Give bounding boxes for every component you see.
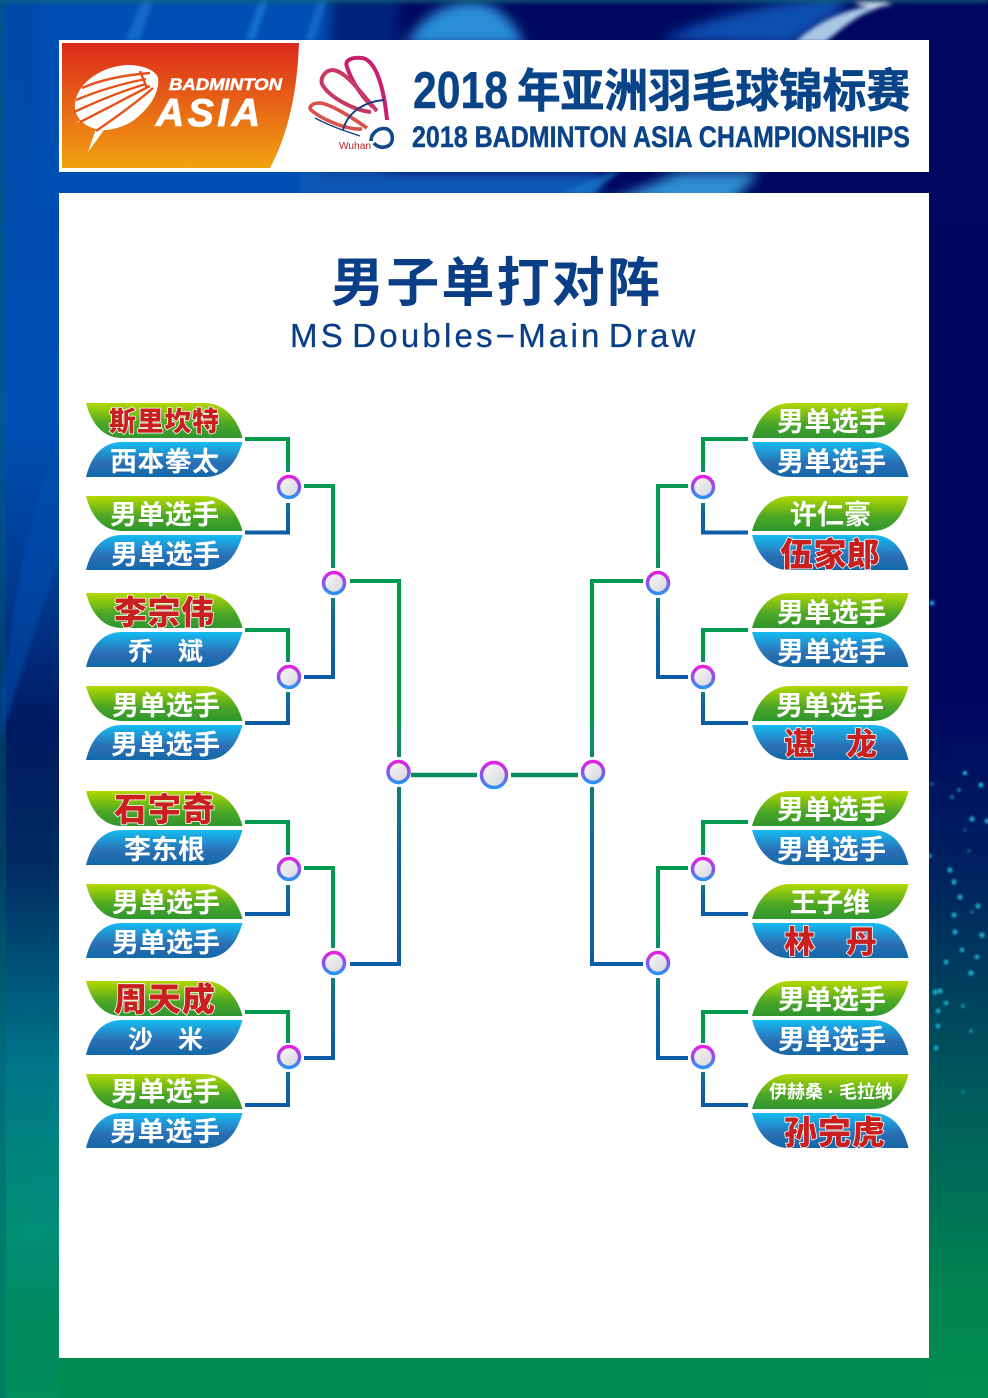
player: 李宗伟: 李宗伟: [114, 594, 214, 631]
bracket lines: [245, 439, 748, 1105]
header title: [412, 62, 910, 154]
player: 谌 龙: 谌 龙: [784, 727, 877, 762]
player: 男单选手 16: [752, 981, 908, 1016]
player: 男单选手 6: [86, 923, 242, 958]
player: 男单选手 7: [86, 1074, 242, 1109]
player: 男单选手 2: 男单选手: [111, 540, 220, 570]
player: 西本拳太: [86, 442, 242, 477]
player: 伊赫桑·毛拉纳: 伊赫桑 · 毛拉纳: [769, 1081, 893, 1102]
logo: Badminton Asia: [62, 43, 299, 168]
player: 许仁豪: 许仁豪: [790, 500, 871, 530]
player: 孙完虎: [752, 1113, 908, 1151]
player: 谌 龙: [752, 725, 908, 762]
player: 男单选手 3: [86, 686, 242, 721]
player: 斯里坎特: [86, 403, 242, 438]
player: 男单选手 16: 男单选手: [778, 985, 886, 1015]
player: 西本拳太: 西本拳太: [110, 447, 219, 477]
player: 男单选手 11: [752, 593, 908, 628]
player: 许仁豪: [752, 496, 908, 531]
player: 孙完虎: 孙完虎: [784, 1114, 885, 1151]
player: 男单选手 17: [752, 1020, 908, 1055]
header panel: [59, 40, 929, 172]
player: 男单选手 5: 男单选手: [112, 888, 220, 918]
player: 王子维: [752, 884, 908, 919]
logo: Badminton Asia: ASIA: [155, 92, 260, 135]
right draw players: [752, 403, 908, 1151]
player: 男单选手 10: 男单选手: [777, 447, 886, 477]
player: 男单选手 8: 男单选手: [110, 1117, 220, 1147]
player: 男单选手 15: [752, 830, 908, 865]
player: 男单选手 4: [86, 725, 242, 760]
player: 男单选手 12: [752, 632, 908, 667]
player: 男单选手 9: [752, 403, 908, 438]
logo: Wuhan shuttlecock: [310, 58, 392, 152]
header title: 2018: [413, 62, 508, 120]
player: 男单选手 13: 男单选手: [776, 691, 884, 721]
player: 石宇奇: [86, 791, 242, 828]
logo: Badminton Asia: BADMINTON: [169, 75, 283, 94]
left draw players: [86, 403, 242, 1148]
player: 男单选手 2: [86, 535, 242, 570]
player: 男单选手 10: [752, 442, 908, 477]
player: 男单选手 14: 男单选手: [777, 795, 886, 825]
player: 男单选手 3: 男单选手: [112, 691, 220, 721]
particle dots: [928, 600, 988, 1094]
player: 男单选手 9: 男单选手: [777, 407, 886, 437]
player: 男单选手 13: [752, 686, 908, 721]
main title: 男子单打对阵: [331, 254, 660, 313]
player: 林 丹: [752, 923, 908, 960]
player: 男单选手 17: 男单选手: [778, 1025, 886, 1055]
player: 男单选手 8: [86, 1113, 242, 1148]
player: 李东根: 李东根: [124, 835, 205, 865]
player: 乔 斌: [86, 632, 242, 667]
player: 沙 米: 沙 米: [128, 1026, 203, 1054]
player: 沙 米: [86, 1020, 242, 1055]
player: 男单选手 14: [752, 791, 908, 826]
player: 男单选手 1: [86, 496, 242, 531]
player: 男单选手 15: 男单选手: [777, 835, 886, 865]
player: 石宇奇: 石宇奇: [114, 791, 215, 828]
player: 周天成: [86, 981, 242, 1018]
player: 李东根: [86, 830, 242, 865]
player: 王子维: 王子维: [790, 888, 870, 918]
player: 男单选手 6: 男单选手: [112, 928, 220, 958]
player: 林 丹: 林 丹: [784, 925, 877, 960]
player: 男单选手 1: 男单选手: [110, 500, 219, 530]
player: 伍家郎: [752, 535, 908, 573]
player: 男单选手 11: 男单选手: [777, 598, 886, 628]
player: 周天成: 周天成: [114, 981, 215, 1018]
player: 伊赫桑·毛拉纳: [752, 1074, 908, 1109]
player: 斯里坎特: 斯里坎特: [109, 407, 219, 437]
player: 男单选手 5: [86, 884, 242, 919]
main panel: [59, 193, 929, 1358]
player: 男单选手 4: 男单选手: [111, 730, 220, 760]
bracket nodes: [278, 476, 714, 1068]
header title: 年亚洲羽毛球锦标赛: [517, 65, 910, 117]
player: 李宗伟: [86, 593, 242, 631]
player: 伍家郎: 伍家郎: [780, 536, 880, 573]
subtitle: MS Doubles−Main Draw: [290, 317, 699, 354]
logo: Wuhan shuttlecock: Wuhan: [339, 141, 371, 152]
player: 乔 斌: 乔 斌: [128, 638, 203, 666]
player: 男单选手 12: 男单选手: [777, 637, 886, 667]
player: 男单选手 7: 男单选手: [111, 1077, 220, 1107]
